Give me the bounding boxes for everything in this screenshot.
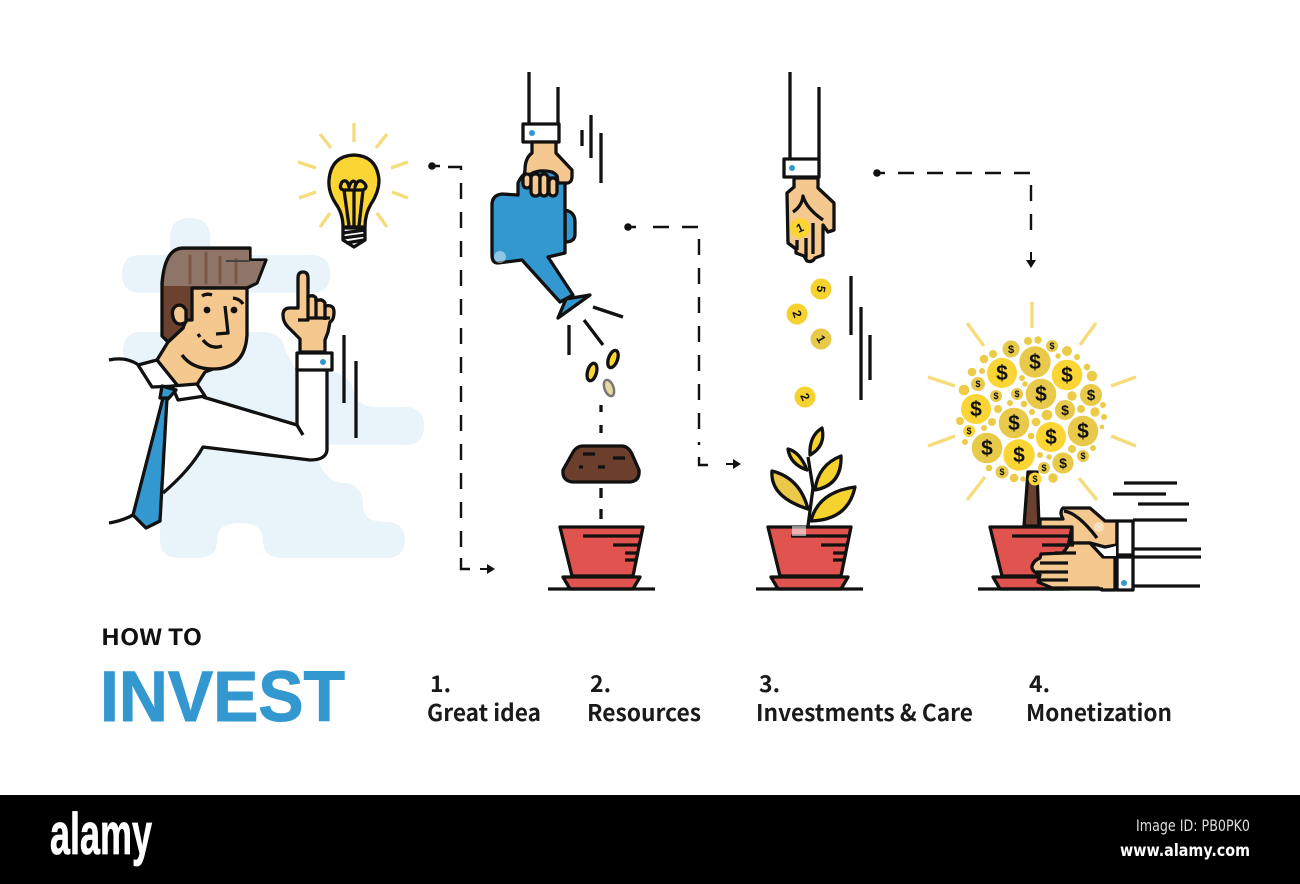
rays (298, 123, 408, 227)
back hand (1040, 508, 1117, 547)
sleeve (529, 72, 558, 123)
falling coin 5: 5 (813, 284, 828, 294)
hair (162, 248, 266, 342)
falling coin 2: 2 (789, 308, 805, 320)
step 4 label: Monetization (1026, 694, 1172, 728)
large dollar coins (961, 346, 1098, 471)
pot 3 with hands (978, 483, 1201, 590)
large dollar coins: $ (996, 362, 1008, 385)
medium and small dollar coins: $ (1041, 463, 1047, 473)
step 3 label (756, 665, 973, 728)
medium and small dollar coins: $ (966, 426, 972, 436)
medium and small dollar coins: $ (1032, 474, 1038, 484)
step 2 label: 2. (590, 665, 611, 699)
hand (524, 142, 572, 183)
large dollar coins: $ (1029, 351, 1041, 374)
title: INVEST (100, 658, 345, 737)
large dollar coins: $ (1013, 444, 1025, 467)
collar (138, 360, 178, 387)
title (100, 620, 345, 737)
ear (172, 305, 186, 324)
large dollar coins: $ (1035, 383, 1047, 406)
footer logo: alamy (50, 802, 152, 867)
medium and small dollar coins: $ (1049, 341, 1055, 351)
cuff (523, 124, 559, 142)
motion lines (851, 276, 870, 400)
small plain coins (956, 336, 1107, 483)
large dollar coins: $ (981, 437, 993, 460)
cloud background (122, 218, 424, 558)
can body (492, 168, 573, 302)
large dollar coins: $ (1077, 420, 1089, 443)
face and neck (157, 288, 247, 387)
dashed arrow 1 (428, 162, 495, 574)
cuff (297, 353, 332, 370)
medium and small dollar coins: $ (1014, 389, 1020, 399)
motion lines (582, 115, 601, 183)
coin in hand: 1 (794, 220, 806, 236)
hand dropping coins (784, 72, 870, 408)
medium and small dollar coins: $ (1061, 402, 1069, 418)
sleeve and motion lines (1113, 483, 1201, 586)
spray (569, 307, 623, 355)
hair watermark tint (164, 250, 264, 286)
step 2 label (587, 665, 701, 728)
medium and small dollar coins: $ (1008, 344, 1014, 356)
large dollar coins: $ (1008, 412, 1020, 435)
front cuff (1117, 557, 1133, 590)
large dollar coins: $ (1045, 426, 1057, 449)
pot 1 (548, 527, 655, 589)
step 3 label: 3. (759, 665, 780, 699)
watering can with hand (492, 72, 623, 398)
falling coin 5 (810, 278, 832, 300)
fingers (523, 174, 557, 196)
step 4 label (1026, 665, 1172, 728)
step 1 label (427, 665, 541, 728)
falling coin 2 lower: 2 (797, 391, 813, 403)
step 1 label: 1. (430, 665, 451, 699)
medium and small dollar coins (963, 340, 1102, 486)
cuff (784, 159, 819, 177)
plant (772, 428, 855, 526)
medium and small dollar coins: $ (1087, 387, 1096, 404)
medium and small dollar coins: $ (993, 391, 999, 401)
falling coins (585, 362, 599, 382)
trunk (1024, 472, 1039, 526)
title: HOW TO (101, 620, 202, 652)
image id: Image ID: PB0PK0 (1136, 816, 1250, 835)
pot 2 (756, 526, 863, 589)
rose (558, 295, 590, 318)
facial features (182, 294, 243, 369)
motion lines (344, 335, 356, 438)
large dollar coins: $ (1061, 364, 1073, 387)
money tree (928, 302, 1136, 526)
large dollar coins: $ (970, 398, 982, 421)
tie (160, 386, 176, 399)
falling coin 1 (810, 328, 832, 350)
falling coin 2 (786, 304, 808, 324)
medium and small dollar coins: $ (999, 467, 1005, 477)
footer bar (0, 795, 1300, 884)
medium and small dollar coins: $ (1059, 455, 1067, 471)
step 2 label: Resources (587, 694, 701, 728)
light bulb (298, 123, 408, 247)
pot (990, 527, 1072, 576)
falling coin 2 lower (794, 386, 816, 408)
website: www.alamy.com (1120, 841, 1250, 861)
side handle (565, 210, 575, 242)
rays (928, 302, 1136, 500)
medium and small dollar coins: $ (975, 379, 981, 389)
coin in hand (790, 218, 810, 238)
open hand (787, 178, 834, 262)
businessman (109, 248, 356, 528)
dashed arrow 2 (624, 223, 741, 469)
step 3 label: Investments & Care (756, 694, 973, 728)
bulb base (343, 228, 365, 247)
dashed arrow 3 (873, 169, 1036, 268)
front hand (1032, 543, 1115, 590)
step 1 label: Great idea (427, 694, 541, 728)
pointing hand (283, 272, 334, 352)
shirt and arm (109, 359, 327, 523)
step 4 label: 4. (1029, 665, 1050, 699)
falling coin 1: 1 (813, 333, 829, 346)
soil with dashes (563, 405, 639, 519)
back cuff (1117, 521, 1133, 555)
medium and small dollar coins: $ (1080, 451, 1086, 461)
